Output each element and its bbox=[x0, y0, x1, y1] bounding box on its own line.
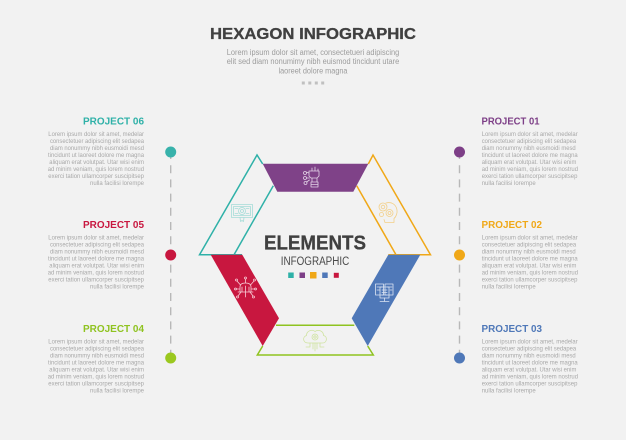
panel: project 02 text: Lorem ipsum dolor sit amet, medelar bbox=[482, 234, 578, 242]
header pagination dots bbox=[302, 82, 324, 84]
hexagon segment: red bbox=[211, 255, 279, 346]
panel: project 02 text: PROJECT 02 bbox=[482, 220, 542, 231]
icon: purple hand and network bbox=[304, 167, 319, 187]
panel: project 02 text: exerci tation ullamcorper suscipitsep bbox=[482, 276, 578, 284]
panel: project 01 text bbox=[482, 116, 578, 187]
panel: project 03 text: nulla facilisi lorempe bbox=[482, 388, 536, 394]
panel: project 02 text: nulla facilisi lorempe bbox=[482, 284, 536, 290]
panel: project 06 text: nulla facilisi lorempe bbox=[90, 180, 144, 187]
panel: project 02 text: consectetuer adipiscing elit sedapea bbox=[482, 242, 577, 248]
panel: project 04 text: exerci tation ullamcorper suscipitsep bbox=[48, 380, 144, 388]
panel: project 05 text: tincidunt ut laoreet dolore me magna bbox=[48, 256, 144, 262]
panel: project 02 text bbox=[482, 220, 578, 290]
panel: project 06 text: consectetuer adipiscing elit sedapea bbox=[50, 138, 144, 145]
panel: project 06 text: Lorem ipsum dolor sit amet, medelar bbox=[48, 131, 145, 138]
panel: project 04 text: Lorem ipsum dolor sit amet, medelar bbox=[48, 338, 145, 346]
center subheading: INFOGRAPHIC bbox=[281, 256, 349, 268]
panel: project 03 text: diam nonummy nibh eusmoidi mesd bbox=[482, 352, 576, 360]
panel: project 06 text: exerci tation ullamcorper suscipitsep bbox=[48, 173, 144, 180]
panel: project 06 text: PROJECT 06 bbox=[83, 116, 144, 128]
panel: project 02 text: tincidunt ut laoreet dolore me magna bbox=[482, 256, 578, 262]
panel: project 05 text: diam nonummy nibh eusmoidi mesd bbox=[50, 248, 144, 256]
center heading: ELEMENTS bbox=[264, 232, 366, 254]
panel: project 03 text: aliquam erat volutpat. Utar wisi enim bbox=[482, 366, 576, 374]
header description bbox=[227, 48, 400, 75]
panel: project 05 text: aliquam erat volutpat. Utar wisi enim bbox=[49, 262, 144, 270]
panel: project 01 text: nulla facilisi lorempe bbox=[482, 180, 536, 187]
panel: project 05 text: Lorem ipsum dolor sit amet, medelar bbox=[48, 234, 145, 242]
header description: elit sed diam nonumimy nibh euismod tincidunt utare bbox=[227, 57, 400, 66]
center colour squares bbox=[288, 272, 339, 278]
hexagon segment: green outline bbox=[257, 346, 373, 355]
panel: project 03 text: PROJECT 03 bbox=[482, 324, 542, 335]
panel: project 06 text: ad minim veniam, quis lorem nostrud bbox=[48, 166, 144, 173]
panel: project 01 text: diam nonummy nibh eusmoidi mesd bbox=[482, 145, 576, 152]
panel: project 03 text bbox=[482, 324, 578, 394]
header description: laoreet dolore magna bbox=[278, 66, 348, 75]
panel: project 05 text: exerci tation ullamcorper suscipitsep bbox=[48, 276, 144, 284]
hexagon segment: orange outline bbox=[368, 155, 430, 255]
hexagon segment: purple bbox=[263, 164, 368, 192]
panel: project 01 text: PROJECT 01 bbox=[482, 116, 540, 128]
header description: Lorem ipsum dolor sit amet, consectetueri adipiscing bbox=[227, 48, 399, 57]
icon: green cloud network bbox=[304, 330, 326, 351]
panel: project 03 text: consectetuer adipiscing elit sedapea bbox=[482, 346, 577, 352]
panel: project 05 text bbox=[48, 220, 145, 290]
panel: project 04 text: aliquam erat volutpat. Utar wisi enim bbox=[49, 366, 144, 374]
panel: project 05 text: PROJECT 05 bbox=[83, 220, 144, 231]
panel: project 03 text: ad minim veniam, quis lorem nostrud bbox=[482, 374, 578, 380]
panel: project 01 text: tincidunt ut laoreet dolore me magna bbox=[482, 152, 578, 159]
panel: project 03 text: Lorem ipsum dolor sit amet, medelar bbox=[482, 338, 578, 346]
icon: red chip burst bbox=[234, 277, 256, 298]
left timeline bbox=[165, 146, 176, 364]
icon: blue document screens bbox=[376, 284, 393, 302]
panel: project 06 text bbox=[48, 116, 145, 187]
hexagon segment: orange inner edge bbox=[357, 186, 396, 255]
panel: project 06 text: aliquam erat volutpat. Utar wisi enim bbox=[49, 159, 144, 166]
panel: project 01 text: aliquam erat volutpat. Utar wisi enim bbox=[482, 159, 576, 166]
panel: project 01 text: consectetuer adipiscing elit sedapea bbox=[482, 138, 577, 145]
panel: project 04 text: diam nonummy nibh eusmoidi mesd bbox=[50, 352, 144, 360]
hexagon segment: teal outline bbox=[200, 155, 263, 255]
icon: teal circuit screen bbox=[232, 204, 252, 222]
panel: project 05 text: nulla facilisi lorempe bbox=[90, 284, 144, 290]
panel: project 05 text: ad minim veniam, quis lorem nostrud bbox=[48, 270, 144, 276]
panel: project 03 text: exerci tation ullamcorper suscipitsep bbox=[482, 380, 578, 388]
panel: project 02 text: diam nonummy nibh eusmoidi mesd bbox=[482, 248, 576, 256]
hexagon segment: green inner edge bbox=[276, 324, 354, 326]
panel: project 04 text: ad minim veniam, quis lorem nostrud bbox=[48, 374, 144, 380]
panel: project 05 text: consectetuer adipiscing elit sedapea bbox=[50, 242, 144, 248]
right timeline bbox=[454, 146, 465, 364]
hexagon segment: blue bbox=[352, 255, 420, 346]
panel: project 01 text: ad minim veniam, quis lorem nostrud bbox=[482, 166, 578, 173]
panel: project 04 text: tincidunt ut laoreet dolore me magna bbox=[48, 360, 144, 366]
panel: project 02 text: ad minim veniam, quis lorem nostrud bbox=[482, 270, 578, 276]
hexagon segment: teal inner edge bbox=[234, 186, 273, 255]
panel: project 01 text: exerci tation ullamcorper suscipitsep bbox=[482, 173, 578, 180]
title: HEXAGON INFOGRAPHIC bbox=[210, 26, 416, 43]
panel: project 04 text: nulla facilisi lorempe bbox=[90, 388, 144, 394]
panel: project 04 text: PROJECT 04 bbox=[83, 324, 144, 335]
panel: project 06 text: tincidunt ut laoreet dolore me magna bbox=[48, 152, 144, 159]
icon: orange head with gears bbox=[379, 203, 397, 222]
panel: project 04 text: consectetuer adipiscing elit sedapea bbox=[50, 346, 144, 352]
panel: project 06 text: diam nonummy nibh eusmoidi mesd bbox=[50, 145, 144, 152]
panel: project 04 text bbox=[48, 324, 145, 394]
panel: project 02 text: aliquam erat volutpat. Utar wisi enim bbox=[482, 262, 576, 270]
panel: project 01 text: Lorem ipsum dolor sit amet, medelar bbox=[482, 131, 578, 138]
panel: project 03 text: tincidunt ut laoreet dolore me magna bbox=[482, 360, 578, 366]
